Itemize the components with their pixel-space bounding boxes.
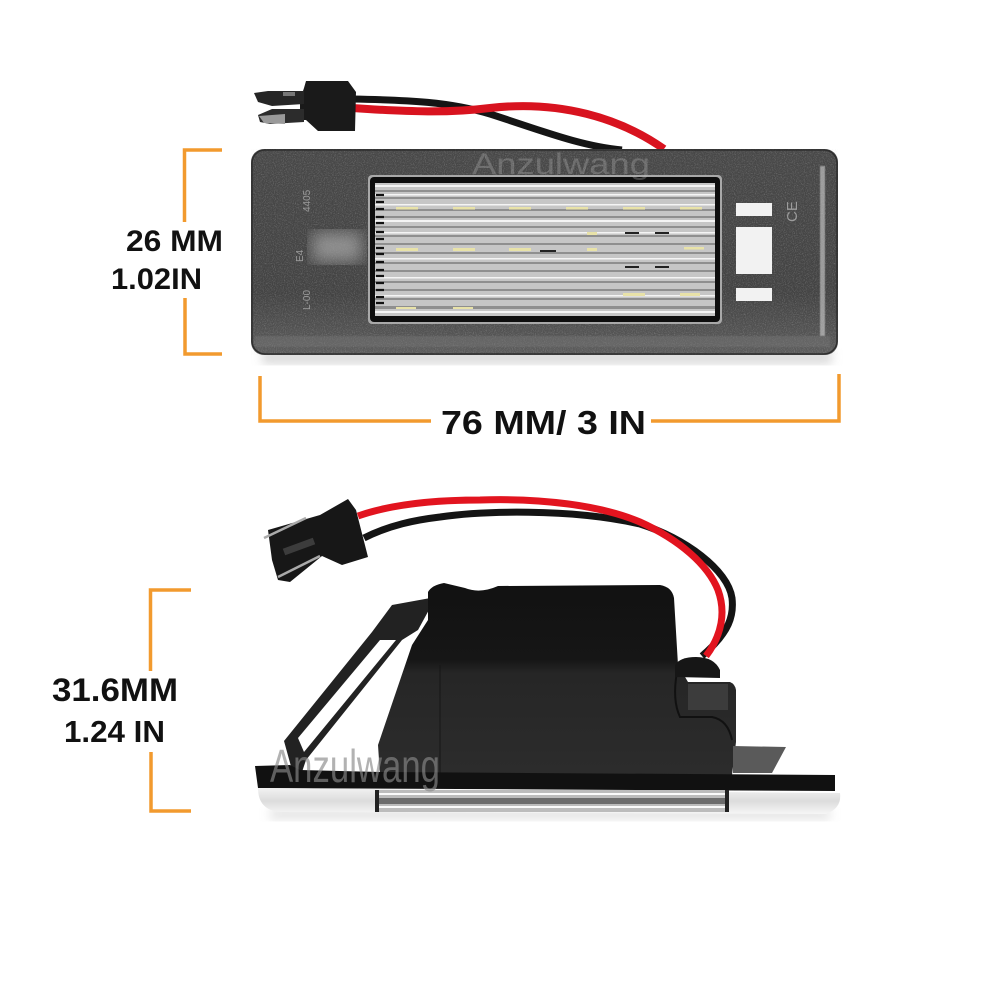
product photo: front view of lamp (251, 81, 838, 364)
marking: CE: CE (784, 201, 801, 222)
label: 76 MM / 3 IN: 76 MM/ 3 IN (441, 404, 646, 441)
bracket: width right (651, 374, 839, 421)
marking: number: 4405 (302, 189, 313, 212)
label: 1.24IN: 1.24 IN (64, 714, 165, 749)
marking: E approval: E4 (295, 249, 306, 262)
watermark: bottom: Anzulwang (270, 740, 440, 792)
dimension: depth 31.6 mm (52, 590, 191, 811)
label: 1.02IN: 1.02IN (111, 263, 202, 296)
rear tab (733, 746, 786, 773)
dimension: height 26 mm (111, 150, 223, 354)
shadow under plate (262, 350, 832, 364)
angled bracket (284, 597, 436, 772)
label: 31.6MM: 31.6MM (52, 672, 178, 708)
plate markings (295, 189, 801, 310)
bracket: depth top (150, 590, 191, 671)
wires (352, 99, 664, 150)
connector (254, 81, 356, 131)
label: 26 MM: 26 MM (126, 225, 223, 258)
product photo: side view of lamp (255, 499, 840, 820)
dimension: width 76 mm (260, 374, 839, 441)
bracket: depth bottom (151, 752, 191, 811)
grommet (675, 657, 720, 678)
connector (264, 499, 368, 582)
white slots (736, 203, 772, 301)
foam gasket (255, 765, 835, 791)
wires (358, 500, 732, 656)
watermark: top: Anzulwang (472, 148, 650, 181)
dark SMD marks (540, 233, 669, 267)
LED row 2 (396, 248, 418, 251)
plate body (251, 149, 838, 355)
lens comb edge (376, 195, 384, 303)
shadow under lamp (270, 808, 830, 820)
LED row 1 (396, 207, 704, 309)
marking: L-00: L-00 (302, 290, 313, 310)
chrome strip (258, 788, 840, 814)
LED row 3 (623, 293, 645, 296)
bracket: height bottom (185, 298, 222, 354)
housing (378, 583, 736, 775)
bracket: width left (260, 376, 431, 421)
bracket: height top (184, 150, 222, 222)
lens (368, 175, 722, 324)
